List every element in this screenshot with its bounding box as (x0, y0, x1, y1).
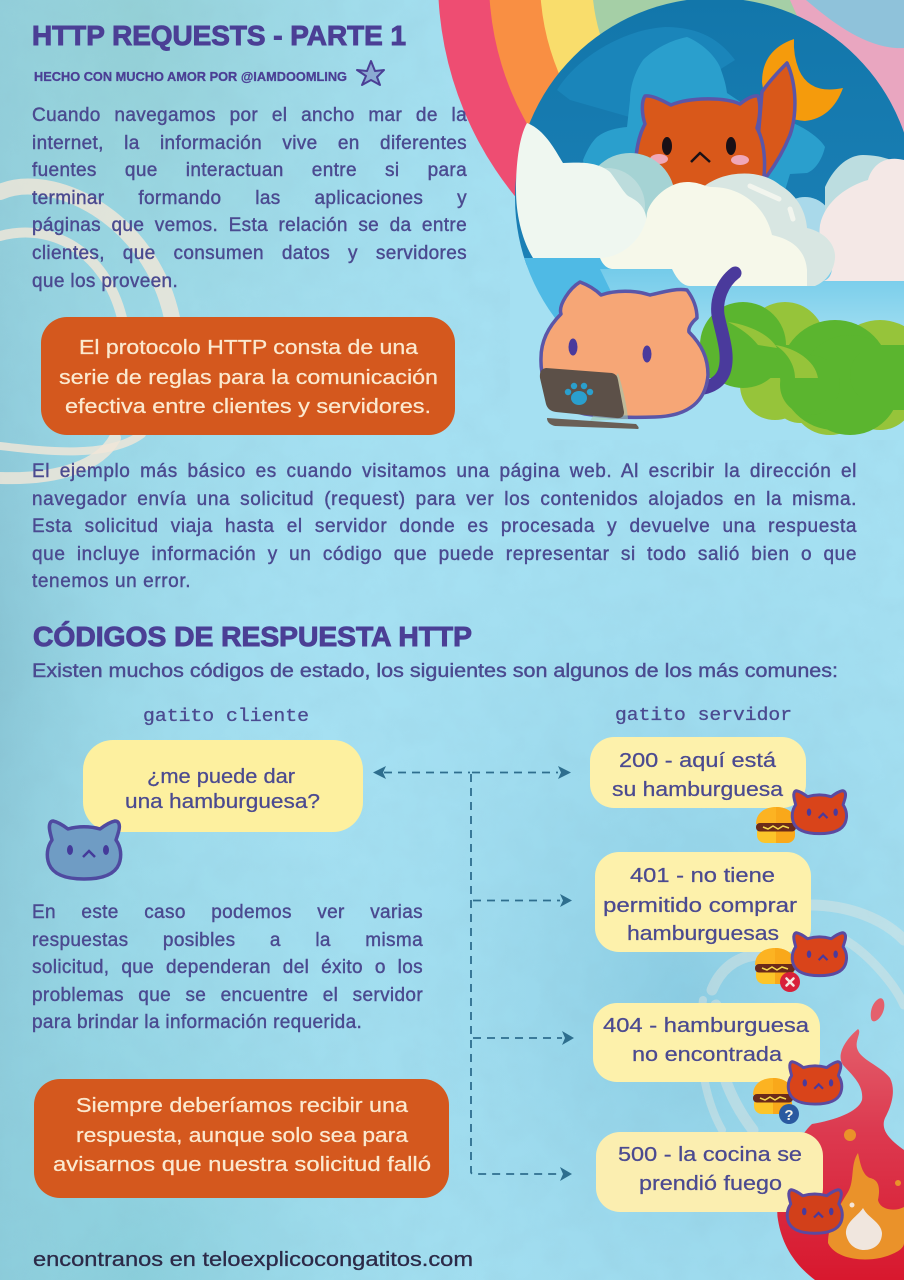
grey cloud (700, 174, 835, 286)
icon: burger 404 (753, 1078, 793, 1114)
text block: explanation: para brindar la información requerida. (32, 1012, 362, 1033)
cat: server 200 (792, 791, 847, 834)
text block: intro: internet, la información vive en diferentes (32, 133, 467, 154)
bubble: 404: no encontrada (632, 1044, 783, 1066)
right cloud (819, 159, 904, 281)
night sky circle (510, 0, 904, 345)
icon: burger 401 (755, 948, 795, 984)
text block: example (32, 461, 857, 592)
icon: star (357, 61, 384, 85)
text block: explanation: En este caso podemos ver varias (32, 902, 423, 923)
text block: intro: clientes, que consumen datos y servidores (32, 243, 467, 264)
inner flame (828, 1153, 904, 1259)
body (541, 282, 708, 417)
cat: server 401 (792, 933, 847, 976)
text block: example: El ejemplo más básico es cuando visitamos una página web. Al escribir la dirección el (32, 461, 857, 482)
bush (700, 302, 904, 435)
head (635, 96, 765, 190)
byline: HECHO CON MUCHO AMOR POR @IAMDOOMLING (34, 69, 347, 84)
back teal cloud (585, 153, 675, 243)
bubble: client request: ¿me puede dar (147, 766, 295, 788)
callout: protocol (41, 317, 455, 435)
tail (704, 273, 735, 388)
bubble: 401 (595, 852, 811, 952)
callout: always a response (34, 1079, 449, 1198)
heading: response codes: CÓDIGOS DE RESPUESTA HTTP (33, 621, 472, 652)
text block: example: tenemos un error. (32, 571, 191, 592)
bubble: 500: 500 - la cocina se (618, 1144, 802, 1166)
intro line: Existen muchos códigos de estado, los siguientes son algunos de los más comunes: (32, 661, 838, 682)
footer: encontranos en teloexplicocongatitos.com (33, 1249, 473, 1271)
fire (777, 998, 904, 1280)
light sky under clouds (600, 269, 904, 345)
white flame (846, 1208, 882, 1250)
arrows (373, 766, 574, 1181)
bubble: 401: 401 - no tiene (630, 865, 775, 887)
moon (762, 39, 843, 121)
icon: burger 200 (756, 807, 796, 843)
bubble: 404: 404 - hamburguesa (603, 1015, 810, 1037)
tail (755, 63, 795, 176)
text block: intro (32, 105, 467, 292)
swirl: bottom right (700, 905, 904, 1130)
text block: explanation: respuestas posibles a la misma (32, 930, 423, 951)
label: client: gatito cliente (143, 707, 309, 727)
swirl: left (0, 187, 172, 478)
text block: intro: Cuando navegamos por el ancho mar de la (32, 105, 467, 126)
text block: intro: que los proveen. (32, 271, 178, 292)
bubble: 200: 200 - aquí está (619, 750, 777, 772)
cat: server 500 (787, 1190, 842, 1233)
callout: always a response: avisarnos que nuestra solicitud falló (53, 1154, 431, 1176)
bubble: client request: una hamburguesa? (125, 791, 320, 813)
rainbow (438, 0, 904, 440)
icon: question badge (779, 1104, 799, 1124)
text block: explanation (32, 902, 423, 1033)
icon: question badge: ? (784, 1107, 794, 1124)
title: HTTP REQUESTS - PARTE 1 (32, 20, 406, 51)
label: server: gatito servidor (615, 706, 792, 726)
icon: error badge (780, 972, 800, 992)
icon: paw (565, 383, 593, 405)
cat: peach with laptop (540, 273, 735, 429)
bubble: 500: prendió fuego (639, 1173, 782, 1195)
callout: always a response: Siempre deberíamos recibir una (76, 1095, 409, 1117)
text block: example: Esta solicitud viaja hasta el servidor donde es procesada y devuelve una respuesta (32, 516, 857, 537)
text block: intro: fuentes que interactuan entre si para (32, 160, 467, 181)
bubble: 401: hamburguesas (627, 923, 779, 945)
cat: server 404 (788, 1062, 842, 1104)
text block: example: navegador envía una solicitud (request) para ver los contenidos alojados en la misma. (32, 489, 857, 510)
text block: intro: terminar formando las aplicaciones y (32, 188, 467, 209)
text block: example: que incluye información y un código que puede representar si todo salió bien o que (32, 544, 857, 565)
text block: intro: páginas que vemos. Esta relación se da entre (32, 215, 467, 236)
clouds (516, 123, 904, 286)
bubble: 200 (590, 737, 806, 808)
bubble: 401: permitido comprar (603, 895, 797, 917)
bubble: client request (83, 740, 363, 832)
center cloud (600, 182, 807, 286)
text block: explanation: solicitud, que dependeran del éxito o los (32, 957, 423, 978)
text block: explanation: problemas que se encuentre el servidor (32, 985, 423, 1006)
lighter band (557, 27, 735, 120)
bubble: 404 (593, 1003, 820, 1082)
callout: always a response: respuesta, aunque solo sea para (76, 1125, 409, 1147)
laptop (540, 368, 639, 429)
callout: protocol: serie de reglas para la comunicación (59, 367, 438, 389)
bubble: 500 (596, 1132, 823, 1212)
lighter blue cloud behind cat (583, 37, 825, 188)
left white cloud (516, 123, 647, 258)
callout: protocol: El protocolo HTTP consta de una (79, 337, 419, 359)
cat: client (47, 821, 121, 879)
bubble: 200: su hamburguesa (612, 779, 784, 801)
callout: protocol: efectiva entre clientes y servidores. (65, 396, 431, 418)
cat: orange peeking from clouds (635, 63, 795, 190)
